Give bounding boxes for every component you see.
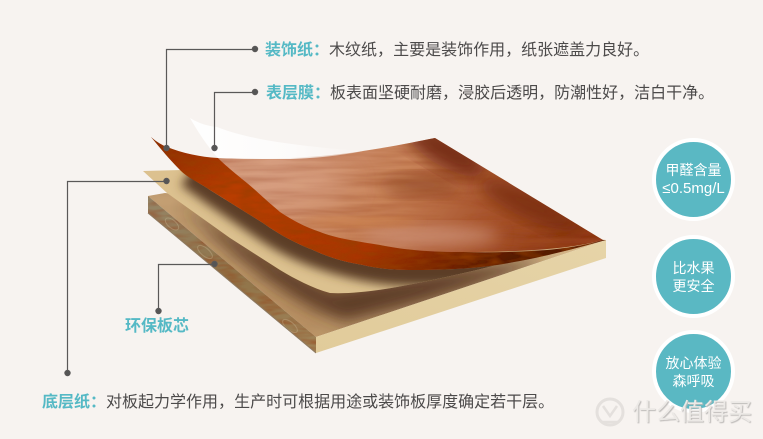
wood board core bbox=[148, 193, 606, 353]
leader line: decorative paper bbox=[164, 46, 258, 151]
label: decorative paper: 装饰纸：木纹纸，主要是装饰作用，纸张遮盖力良好。 bbox=[265, 36, 649, 60]
badge: breathe forest air: 放心体验 bbox=[666, 354, 722, 370]
badge: breathe forest air: 森呼吸 bbox=[672, 372, 714, 388]
leader line: surface film bbox=[212, 89, 258, 151]
decorative wood veneer sheet bbox=[151, 137, 606, 270]
badge: safer than fruit: 更安全 bbox=[672, 278, 714, 294]
badge: formaldehyde content bbox=[652, 138, 735, 221]
cream bottom paper layer bbox=[140, 165, 500, 295]
badge: safer than fruit: 比水果 bbox=[672, 260, 714, 276]
leader line: bottom paper bbox=[65, 178, 169, 376]
transparent surface film bbox=[190, 118, 363, 159]
label: surface film: 表层膜：板表面坚硬耐磨，浸胶后透明，防潮性好，洁白干净。 bbox=[266, 79, 714, 103]
watermark logo icon bbox=[597, 399, 623, 425]
badge: formaldehyde content: 甲醛含量 bbox=[666, 162, 722, 178]
badge: safer than fruit bbox=[652, 235, 735, 318]
leader line: board core bbox=[156, 261, 217, 314]
watermark text: 什么值得买 bbox=[632, 399, 752, 426]
badge: formaldehyde content: ≤0.5mg/L bbox=[662, 180, 725, 197]
badge: breathe forest air bbox=[652, 330, 735, 413]
label: bottom paper: 底层纸：对板起力学作用，生产时可根据用途或装饰板厚度确定若干层。 bbox=[42, 388, 554, 412]
label: board core: 环保板芯 bbox=[125, 318, 189, 335]
